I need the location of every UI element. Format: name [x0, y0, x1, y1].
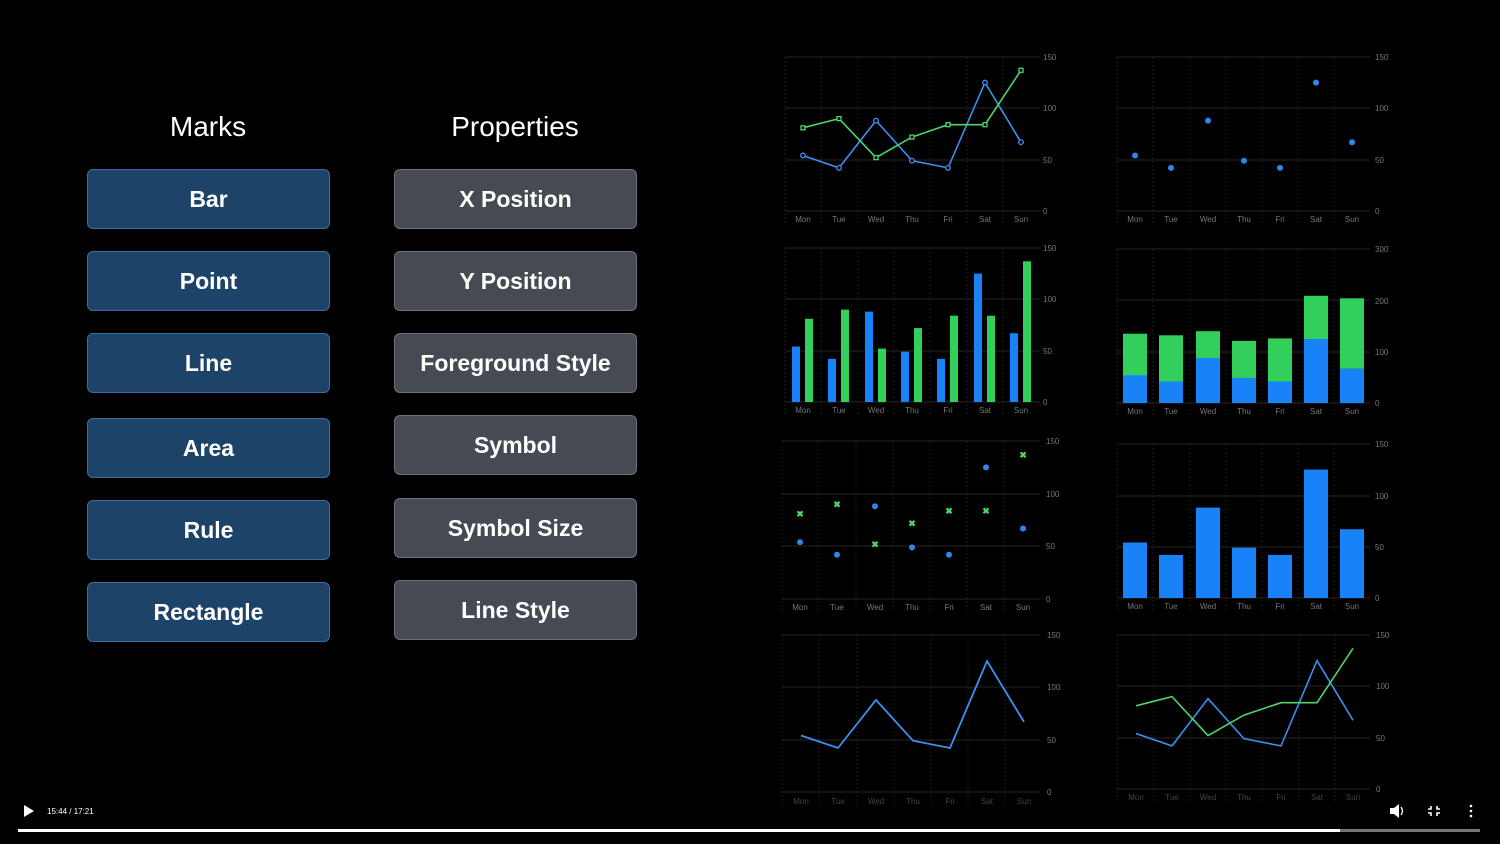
chart: blue bars: 50	[1375, 543, 1384, 552]
chart: point plot: 150	[1375, 53, 1389, 62]
chart: point plot: 100	[1375, 104, 1389, 113]
button: Symbol: Symbol	[474, 432, 557, 458]
chart: grouped bars: Wed	[868, 406, 884, 415]
button: Line Style	[394, 580, 637, 640]
icon: play	[24, 805, 34, 817]
chart: grouped bars: Sun	[1014, 406, 1028, 415]
chart: single line: 150	[1047, 631, 1061, 640]
chart: stacked bars: Sat	[1310, 407, 1323, 416]
button: Y Position	[394, 251, 637, 311]
heading: Marks: Marks	[170, 111, 246, 142]
button: X Position: X Position	[459, 186, 572, 212]
chart: point plot	[1117, 53, 1389, 224]
chart: points with symbols: 0	[1046, 595, 1051, 604]
chart: two lines: Mon	[1128, 793, 1144, 802]
heading: Properties: Properties	[451, 111, 579, 142]
chart: blue bars: Sun	[1345, 602, 1359, 611]
chart: points with symbols: ✖	[796, 509, 804, 519]
button: Line	[87, 333, 330, 393]
chart: point plot: 0	[1375, 207, 1380, 216]
chart: grouped bars: 150	[1043, 244, 1057, 253]
chart: two lines: 50	[1376, 734, 1385, 743]
chart: grouped bars: Tue	[832, 406, 846, 415]
chart: grouped bars: Sat	[979, 406, 992, 415]
icon: volume	[1390, 804, 1402, 818]
chart: points with symbols: 100	[1046, 490, 1060, 499]
chart: point plot: Tue	[1164, 215, 1178, 224]
chart: single line: Tue	[831, 797, 845, 806]
button: Point: Point	[180, 268, 237, 294]
chart: line with symbols: 0	[1043, 207, 1048, 216]
chart: line with symbols	[785, 53, 1057, 224]
chart: line with symbols: 150	[1043, 53, 1057, 62]
chart: blue bars: 0	[1375, 594, 1380, 603]
chart: point plot: Sat	[1310, 215, 1323, 224]
chart: points with symbols: Sat	[980, 603, 993, 612]
chart: stacked bars: 0	[1375, 399, 1380, 408]
chart: line with symbols: Fri	[943, 215, 953, 224]
marks list	[87, 169, 330, 642]
chart: points with symbols: ✖	[833, 500, 841, 510]
chart: blue bars	[1117, 440, 1389, 611]
chart: grouped bars: Mon	[795, 406, 811, 415]
button: Rectangle: Rectangle	[154, 598, 263, 624]
chart: line with symbols: Mon	[795, 215, 811, 224]
chart: line with symbols: Wed	[868, 215, 884, 224]
chart: single line: Fri	[945, 797, 955, 806]
chart: blue bars: Fri	[1275, 602, 1285, 611]
chart: stacked bars: Fri	[1275, 407, 1285, 416]
chart: single line: 50	[1047, 736, 1056, 745]
chart: single line: 0	[1047, 788, 1052, 797]
chart: two lines: Sat	[1311, 793, 1324, 802]
button: Rule	[87, 500, 330, 560]
chart: two lines: 0	[1376, 785, 1381, 794]
chart: single line: Sat	[981, 797, 994, 806]
chart: line with symbols: Sat	[979, 215, 992, 224]
chart: points with symbols: Wed	[867, 603, 883, 612]
chart: single line: Thu	[906, 797, 920, 806]
chart: stacked bars: Sun	[1345, 407, 1359, 416]
chart: two lines: Sun	[1346, 793, 1360, 802]
chart: two lines	[1117, 631, 1390, 802]
chart: points with symbols: Tue	[830, 603, 844, 612]
button: Bar: Bar	[189, 186, 228, 212]
button: Symbol	[394, 415, 637, 475]
chart: points with symbols: ✖	[982, 506, 990, 516]
chart: line with symbols: Sun	[1014, 215, 1028, 224]
chart: stacked bars: Thu	[1237, 407, 1251, 416]
chart: grouped bars: 100	[1043, 295, 1057, 304]
chart: point plot: Mon	[1127, 215, 1143, 224]
chart: blue bars: Wed	[1200, 602, 1216, 611]
chart: blue bars: Mon	[1127, 602, 1143, 611]
chart: points with symbols	[782, 437, 1060, 612]
chart: points with symbols: ✖	[1019, 450, 1027, 460]
chart: line with symbols: Tue	[832, 215, 846, 224]
properties list	[394, 169, 637, 640]
button: Line Style: Line Style	[461, 596, 570, 622]
chart: points with symbols: ✖	[871, 540, 879, 550]
chart: points with symbols: Fri	[944, 603, 954, 612]
chart: stacked bars: 100	[1375, 348, 1389, 357]
button: Bar	[87, 169, 330, 229]
chart: points with symbols: ✖	[945, 506, 953, 516]
chart: blue bars: Sat	[1310, 602, 1323, 611]
chart: point plot: Wed	[1200, 215, 1216, 224]
chart: point plot: Sun	[1345, 215, 1359, 224]
chart: single line: Mon	[793, 797, 809, 806]
chart: point plot: Fri	[1275, 215, 1285, 224]
chart: points with symbols: 50	[1046, 542, 1055, 551]
chart: blue bars: 150	[1375, 440, 1389, 449]
chart: point plot: 50	[1375, 156, 1384, 165]
chart: line with symbols: 50	[1043, 156, 1052, 165]
chart: points with symbols: Sun	[1016, 603, 1030, 612]
chart: line with symbols: 100	[1043, 104, 1057, 113]
time label: 15:44 / 17:21	[47, 807, 94, 816]
chart: points with symbols: Mon	[792, 603, 808, 612]
button: Symbol Size	[394, 498, 637, 558]
chart: stacked bars	[1117, 245, 1389, 416]
player controls	[18, 804, 1480, 832]
button: X Position	[394, 169, 637, 229]
button: Area	[87, 418, 330, 478]
chart: points with symbols: ✖	[908, 518, 916, 528]
button: Foreground Style: Foreground Style	[420, 350, 611, 376]
button: Rectangle	[87, 582, 330, 642]
chart: blue bars: 100	[1375, 492, 1389, 501]
button: Y Position: Y Position	[459, 268, 572, 294]
button: Foreground Style	[394, 333, 637, 393]
chart: grouped bars: Fri	[943, 406, 953, 415]
icon: more	[1470, 805, 1472, 817]
chart: two lines: 150	[1376, 631, 1390, 640]
chart: blue bars: Tue	[1164, 602, 1178, 611]
chart: stacked bars: 300	[1375, 245, 1389, 254]
button: Line: Line	[185, 350, 232, 376]
chart: two lines: Thu	[1237, 793, 1251, 802]
chart: single line: Wed	[868, 797, 884, 806]
chart: two lines: Wed	[1200, 793, 1216, 802]
button: Rule: Rule	[184, 516, 233, 542]
icon: exit fullscreen	[1428, 806, 1440, 816]
button: Area: Area	[183, 434, 234, 460]
chart: single line: 100	[1047, 683, 1061, 692]
chart: point plot: Thu	[1237, 215, 1251, 224]
chart: stacked bars: Wed	[1200, 407, 1216, 416]
chart: points with symbols: Thu	[905, 603, 919, 612]
chart: two lines: Fri	[1276, 793, 1286, 802]
chart: grouped bars: 50	[1043, 347, 1052, 356]
chart: stacked bars: Mon	[1127, 407, 1143, 416]
button: Point	[87, 251, 330, 311]
progress bar	[18, 829, 1480, 832]
chart: blue bars: Thu	[1237, 602, 1251, 611]
chart: two lines: Tue	[1165, 793, 1179, 802]
chart: stacked bars: 200	[1375, 297, 1389, 306]
chart: grouped bars: 0	[1043, 398, 1048, 407]
chart: grouped bars	[785, 244, 1057, 415]
chart: grouped bars: Thu	[905, 406, 919, 415]
chart: stacked bars: Tue	[1164, 407, 1178, 416]
chart: line with symbols: Thu	[905, 215, 919, 224]
chart: single line	[782, 631, 1061, 806]
button: Symbol Size: Symbol Size	[448, 514, 583, 540]
chart: single line: Sun	[1017, 797, 1031, 806]
chart: two lines: 100	[1376, 682, 1390, 691]
chart: points with symbols: 150	[1046, 437, 1060, 446]
